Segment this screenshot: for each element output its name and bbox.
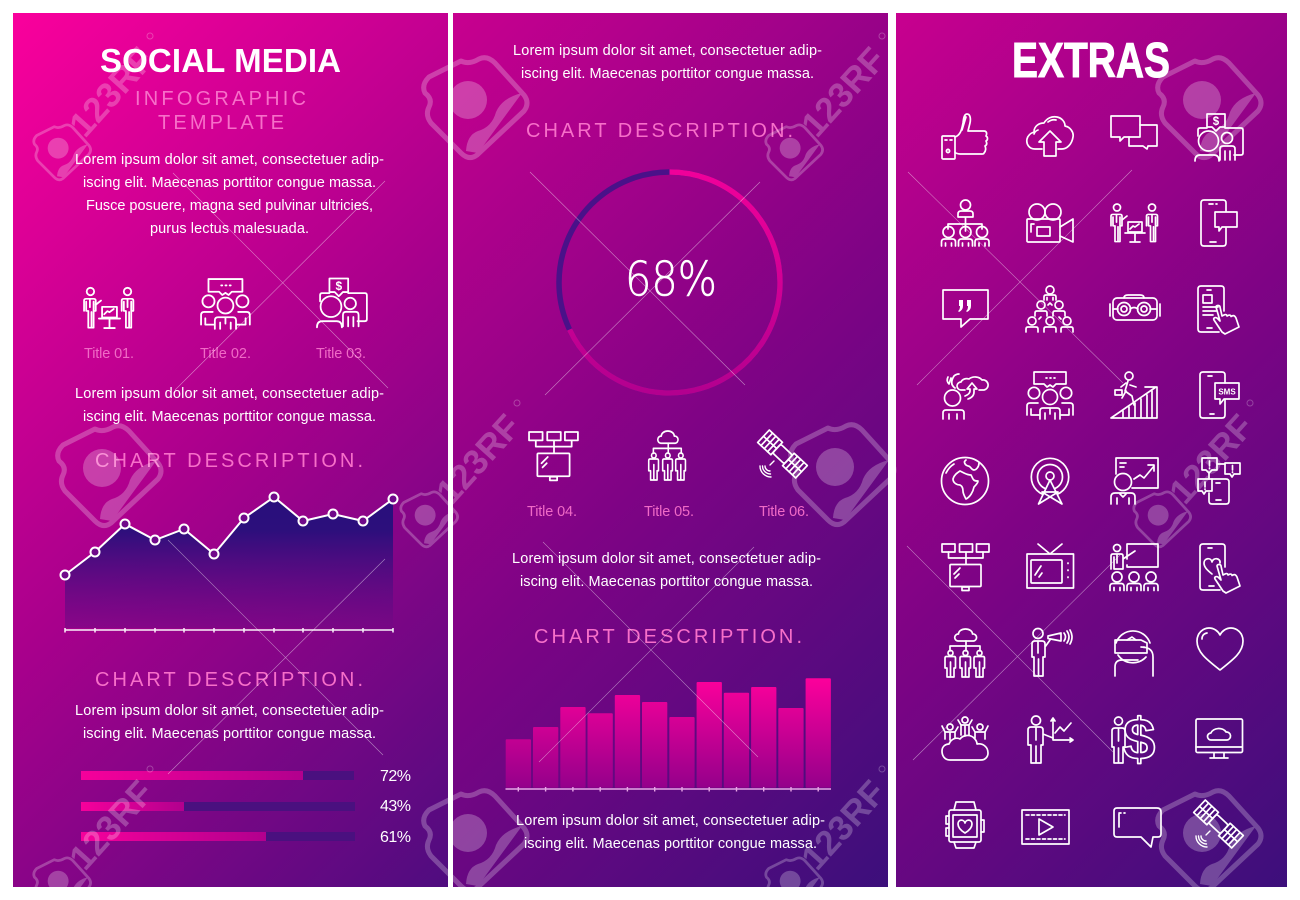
title: social media: SOCIAL MEDIA	[100, 42, 341, 79]
label: title 03: Title 03.	[316, 346, 366, 362]
icon: chat bubbles	[1111, 116, 1157, 149]
text block: Lorem ipsum dolor sit amet, consectetuer adip-	[75, 386, 384, 402]
label: title 01: Title 01.	[84, 346, 134, 362]
intro text block: iscing elit. Maecenas porttitor congue massa.	[83, 175, 376, 191]
subtitle: INFOGRAPHIC	[135, 88, 306, 110]
icon: organisation	[942, 200, 989, 246]
label: title 04: Title 04.	[527, 504, 577, 520]
icon: crowd with speech bubble	[201, 279, 250, 329]
text block: Lorem ipsum dolor sit amet, consectetuer adip-	[512, 551, 821, 567]
bar: 61%	[81, 829, 411, 846]
icon: connected monitors	[942, 544, 989, 590]
title: extras: EXTRAS	[1012, 34, 1170, 88]
icon: cloud team	[945, 629, 984, 677]
icon: presenters	[1111, 204, 1158, 242]
icon: video camera	[1027, 204, 1073, 242]
text block: iscing elit. Maecenas porttitor congue massa.	[83, 726, 376, 742]
icon: person with monitor and dollar	[317, 279, 367, 327]
icon: man with chart	[1028, 716, 1073, 763]
icon: video player	[1022, 810, 1069, 844]
text block	[75, 703, 384, 742]
heading: donut chart: CHART DESCRIPTION.	[526, 120, 793, 142]
icon: VR glasses	[1110, 295, 1160, 320]
label: title 05: Title 05.	[644, 504, 694, 520]
label: title 02: Title 02.	[200, 346, 251, 362]
bar: 61%: 61%	[380, 829, 411, 846]
donut chart: 68%: 68%	[625, 252, 717, 308]
icon: television	[1027, 544, 1074, 588]
icon: presenter with audience	[1110, 544, 1158, 590]
bar: 43%: 43%	[380, 798, 411, 815]
intro text block	[75, 152, 384, 237]
label: title 06: Title 06.	[759, 504, 809, 520]
icon: man with megaphone	[1032, 628, 1072, 676]
heading: progress bars: CHART DESCRIPTION.	[95, 669, 363, 691]
icon: monitor with cloud	[1196, 719, 1242, 758]
text block: iscing elit. Maecenas porttitor congue massa.	[83, 409, 376, 425]
bar: 43%	[81, 798, 411, 815]
intro text block: purus lectus malesuada.	[150, 221, 309, 237]
line chart	[60, 492, 398, 632]
watermark: 123RF stock marks: 123RF	[62, 40, 161, 144]
text block	[513, 43, 822, 82]
icon: signal tower	[1031, 458, 1069, 504]
icon: heart	[1197, 628, 1243, 670]
subtitle: TEMPLATE	[158, 112, 284, 134]
icon: crowd with speech bubble	[1027, 372, 1073, 419]
icon: connected monitors	[529, 432, 578, 480]
icon: thumbs up	[942, 114, 988, 159]
icon: SMS phone	[1200, 372, 1239, 418]
bar: 72%: 72%	[380, 768, 411, 785]
icon: presenters	[84, 288, 133, 328]
icon: brainstorm	[943, 374, 988, 419]
icon: phone with alerts	[1198, 458, 1240, 504]
icon: globe	[942, 458, 988, 504]
icon: smartwatch with heart	[946, 802, 984, 848]
text block: iscing elit. Maecenas porttitor congue massa.	[521, 66, 814, 82]
text block	[512, 551, 821, 590]
text block	[75, 386, 384, 425]
icon: pyramid of people	[1026, 286, 1073, 332]
icon: satellite	[758, 430, 807, 478]
text block: Lorem ipsum dolor sit amet, consectetuer adip-	[75, 703, 384, 719]
icon: people on a cloud	[942, 717, 988, 760]
icon: empty speech bubble	[1114, 808, 1161, 847]
watermark: cross lines	[168, 170, 1132, 774]
panel: extras	[896, 13, 1287, 887]
icon: quote bubble	[943, 290, 988, 327]
icon: runner on growth chart	[1111, 372, 1157, 418]
icon: cloud upload	[1027, 117, 1073, 156]
icon: phone with touching hand	[1198, 286, 1239, 334]
icon: SMS phone: SMS	[1218, 388, 1236, 396]
text block: Lorem ipsum dolor sit amet, consectetuer adip-	[513, 43, 822, 59]
icon: phone with heart and hand	[1200, 544, 1240, 593]
donut chart: 68%	[559, 172, 780, 393]
text block: Lorem ipsum dolor sit amet, consectetuer adip-	[516, 813, 825, 829]
panel: charts	[453, 13, 888, 887]
icon: man with dollar sign: $	[1123, 707, 1155, 772]
icon: man in VR headset	[1115, 631, 1153, 676]
heading: bar chart: CHART DESCRIPTION.	[534, 626, 802, 648]
icon: phone with message	[1201, 200, 1237, 246]
text block: iscing elit. Maecenas porttitor congue massa.	[520, 574, 813, 590]
intro text block: Fusce posuere, magna sed pulvinar ultricies,	[86, 198, 373, 214]
bar: 72%	[81, 768, 411, 785]
text block: iscing elit. Maecenas porttitor congue massa.	[524, 836, 817, 852]
bar chart	[506, 678, 831, 792]
icon: satellite	[1194, 800, 1243, 848]
icon: cloud team	[649, 431, 685, 480]
intro text block: Lorem ipsum dolor sit amet, consectetuer adip-	[75, 152, 384, 168]
text block	[516, 813, 825, 852]
heading: line chart: CHART DESCRIPTION.	[95, 450, 363, 472]
icon: presenter with growth board	[1111, 458, 1158, 504]
icon: person with monitor and dollar	[1195, 114, 1243, 161]
panel: social media	[13, 13, 448, 887]
subtitle	[135, 88, 306, 134]
